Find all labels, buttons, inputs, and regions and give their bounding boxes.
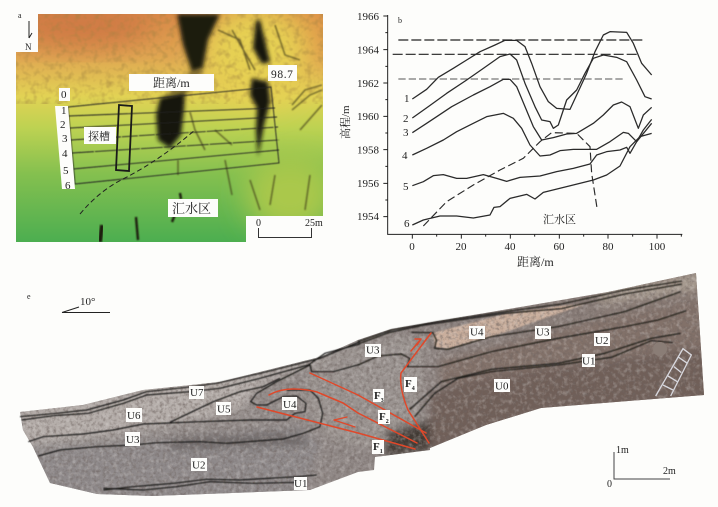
dip angle symbol: 10° bbox=[80, 296, 95, 308]
unit labels: U5 bbox=[217, 404, 231, 416]
catchment label: 汇水区 bbox=[172, 201, 211, 216]
unit labels: U3 bbox=[536, 326, 550, 338]
catchment label: 汇水区 bbox=[543, 212, 576, 226]
y axis tick labels: 1958 bbox=[357, 144, 380, 156]
ladder bbox=[656, 349, 691, 396]
unit labels bbox=[125, 326, 610, 490]
cut-out: north label box: N bbox=[25, 42, 32, 52]
curve numbers: 2 bbox=[403, 113, 408, 125]
y axis tick labels: 1960 bbox=[357, 111, 380, 123]
y axis tick labels bbox=[357, 11, 380, 223]
scale bar: 0 bbox=[256, 218, 261, 229]
y axis tick labels: 1964 bbox=[357, 44, 380, 56]
x axis tick labels: 40 bbox=[504, 241, 516, 253]
profile numbers: 6 bbox=[65, 180, 71, 192]
unit labels: U1 bbox=[582, 356, 595, 368]
profile numbers: 0 bbox=[61, 89, 67, 101]
photomosaic bbox=[20, 273, 704, 496]
unit labels: U3 bbox=[366, 344, 380, 356]
unit labels: U3 bbox=[126, 434, 140, 446]
x axis tick labels: 80 bbox=[602, 241, 614, 253]
curve numbers bbox=[402, 93, 410, 230]
curve numbers: 5 bbox=[403, 181, 409, 193]
unit labels: U2 bbox=[192, 460, 205, 472]
y axis tick labels: 1954 bbox=[357, 211, 380, 223]
distance label bbox=[129, 74, 214, 91]
scale bar: 25m bbox=[305, 218, 323, 229]
section scale: 1m bbox=[616, 445, 629, 456]
x axis tick labels bbox=[409, 241, 666, 253]
panel letter c: e bbox=[27, 292, 31, 301]
profile numbers: 1 bbox=[61, 105, 66, 117]
dip angle symbol bbox=[62, 296, 110, 312]
cut-out: north label box bbox=[16, 11, 38, 52]
distance label: 距离/m bbox=[153, 76, 190, 90]
fault labels: F bbox=[405, 378, 412, 390]
trench rectangle bbox=[116, 105, 132, 171]
max distance label: 98.7 bbox=[271, 69, 294, 81]
unit labels: U4 bbox=[283, 399, 297, 411]
scale bar bbox=[246, 216, 324, 243]
fault labels: 4 bbox=[412, 386, 415, 392]
unit labels: U2 bbox=[595, 335, 608, 347]
section scale bbox=[607, 445, 676, 490]
catchment label bbox=[168, 199, 218, 217]
terrain colour surface bbox=[16, 14, 323, 242]
x axis tick labels: 100 bbox=[649, 241, 666, 253]
x axis tick labels: 20 bbox=[456, 241, 467, 253]
stratigraphic boundary lines bbox=[20, 281, 686, 490]
panel letter b: b bbox=[398, 16, 402, 25]
red fault traces bbox=[257, 333, 431, 449]
panel a: terrain map bbox=[16, 14, 323, 242]
x axis title: 距离/m bbox=[517, 255, 554, 269]
profile curves bbox=[412, 32, 652, 225]
fault labels: 2 bbox=[386, 419, 389, 425]
curve numbers: 3 bbox=[403, 127, 409, 139]
curve numbers: 4 bbox=[402, 150, 408, 162]
x axis tick labels: 0 bbox=[409, 241, 415, 253]
panel c: trench wall photo log bbox=[19, 273, 704, 496]
profile numbers: 4 bbox=[62, 148, 68, 160]
boulder bbox=[653, 342, 667, 356]
profile numbers: 2 bbox=[60, 119, 66, 131]
trench label bbox=[84, 127, 116, 144]
unit labels: U1 bbox=[294, 478, 307, 490]
dashed catchment curve bbox=[423, 133, 597, 226]
fault labels: 1 bbox=[380, 449, 383, 455]
profile numbers: 3 bbox=[62, 133, 68, 145]
fault labels: 3 bbox=[381, 398, 384, 404]
trench label: 探槽 bbox=[88, 129, 110, 143]
fault labels: F bbox=[373, 441, 380, 453]
max distance label bbox=[268, 65, 297, 81]
fault labels: F bbox=[374, 390, 381, 402]
profile numbers bbox=[55, 88, 75, 192]
x axis tick labels: 60 bbox=[554, 241, 565, 253]
panel b: elevation profiles chart bbox=[338, 11, 682, 269]
fault labels bbox=[372, 377, 417, 455]
axes bbox=[383, 15, 682, 239]
y axis tick labels: 1956 bbox=[357, 178, 380, 190]
unit labels: U0 bbox=[495, 380, 509, 392]
curve numbers: 1 bbox=[404, 93, 410, 105]
curve numbers: 6 bbox=[404, 218, 410, 230]
y axis title: 高程/m bbox=[338, 105, 352, 139]
section scale: 2m bbox=[663, 466, 676, 477]
fault labels: F bbox=[379, 411, 386, 423]
unit labels: U7 bbox=[190, 387, 204, 399]
dashed reference lines bbox=[393, 40, 645, 79]
y axis tick labels: 1962 bbox=[357, 78, 379, 90]
unit labels: U4 bbox=[470, 326, 484, 338]
section scale: 0 bbox=[607, 479, 612, 490]
y axis tick labels: 1966 bbox=[357, 11, 380, 23]
dashed catchment boundary bbox=[80, 130, 195, 214]
survey profile grid bbox=[68, 87, 279, 184]
cut-out: north label box: a bbox=[18, 11, 22, 20]
unit labels: U6 bbox=[127, 410, 141, 422]
profile numbers: 5 bbox=[63, 165, 69, 177]
